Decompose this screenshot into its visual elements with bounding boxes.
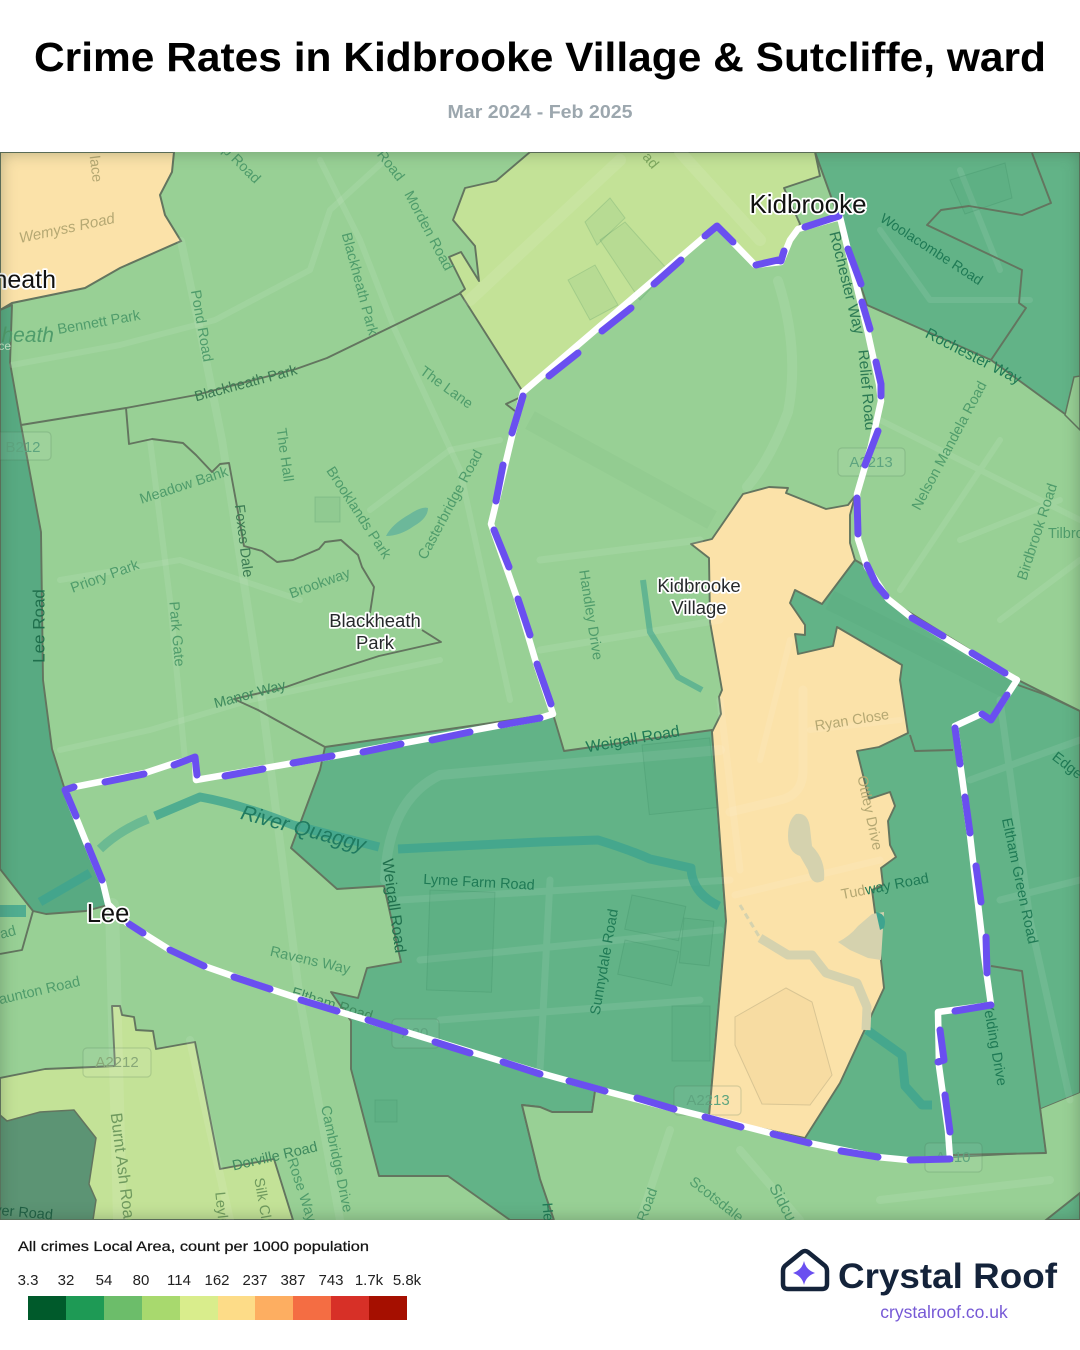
legend scale values: 1.7k [355, 1272, 384, 1289]
place labels: Lee [87, 900, 129, 928]
street labels: Weigall Road [585, 723, 681, 756]
ward boundaries [0, 153, 1080, 1220]
legend scale values: 114 [167, 1272, 191, 1289]
legend scale values: 54 [96, 1272, 112, 1289]
wordmark: Crystal Roof [838, 1257, 1057, 1296]
area: dark green south-west [0, 1110, 96, 1220]
street labels: Ryan Close [814, 707, 890, 735]
subtitle: date range: Mar 2024 - Feb 2025 [448, 102, 632, 122]
legend colour ramp [28, 1296, 407, 1320]
area: yellow-green north [449, 152, 820, 392]
road label plates: A210 [935, 1149, 971, 1166]
street labels: The Hall [272, 427, 296, 483]
website: crystalroof.co.uk [880, 1302, 1008, 1322]
area: base light green [0, 152, 1080, 1220]
street labels: Lee Road [29, 589, 48, 663]
street labels: p Road [219, 143, 263, 187]
street labels: The Lane [417, 363, 476, 412]
street labels: Rochester Way [825, 230, 867, 336]
road label plates [0, 432, 982, 1172]
area: mid green south (Lee Farm) [291, 560, 1080, 1220]
street labels: Ottley Drive [853, 774, 885, 852]
street labels: Road [373, 147, 407, 184]
street labels: Relief Road [854, 349, 878, 431]
street labels: Blackheath Park [338, 231, 381, 338]
legend scale values: 32 [58, 1272, 74, 1289]
ward boundary: white line and purple dashes [65, 216, 1017, 1160]
street labels: Blackheath Park [193, 362, 300, 405]
road label plates: A2212 [95, 1054, 139, 1071]
street labels: Sidcup [765, 1181, 803, 1233]
place labels: Blackheath [329, 610, 421, 631]
road network [12, 152, 1080, 1220]
place labels: Kidbrooke [749, 189, 867, 219]
legend scale values: 237 [242, 1272, 268, 1289]
street labels: ad [639, 150, 661, 172]
legend scale values: 743 [318, 1272, 344, 1289]
street labels: Bennett Park [56, 308, 142, 338]
legend scale values: 162 [204, 1272, 230, 1289]
street labels: Park Gate [165, 601, 187, 667]
street labels: Scotsdale [686, 1174, 746, 1226]
area: light wedge east [1065, 376, 1080, 430]
legend scale values: 387 [280, 1272, 306, 1289]
place labels: Kidbrooke [657, 575, 741, 596]
legend scale values: 5.8k [393, 1272, 422, 1289]
area: light green below ward line east [522, 1091, 1080, 1220]
street labels: Tudway Road [840, 870, 930, 903]
road label plates: B212 [5, 439, 41, 456]
street labels: Silk Close [250, 1177, 277, 1243]
street labels: Woolacombe Road [878, 210, 986, 288]
area: mid green west band [0, 305, 108, 914]
river label: River Quaggy [238, 801, 370, 857]
area: mid green corner south-east [1046, 1193, 1080, 1220]
legend [18, 1238, 422, 1320]
street labels: Morden Road [400, 188, 456, 273]
rail corridor tint [530, 420, 1010, 690]
street labels: Leyland [211, 1191, 232, 1243]
street labels: lace [86, 155, 105, 183]
street labels: Meadow Bank [138, 464, 231, 508]
street labels: Eltham Green Road [998, 817, 1040, 945]
street labels: Brooklands Park [322, 464, 394, 563]
street labels: Birdbrook Road [1015, 482, 1061, 582]
street labels: Handley Drive [575, 569, 605, 661]
river Quaggy [0, 580, 932, 1105]
title: Crime Rates in Kidbrooke Village & Sutcliffe, ward [34, 34, 1046, 80]
street labels: Burnt Ash Road [107, 1112, 139, 1229]
ponds [386, 508, 885, 1105]
sports pitches and plots [315, 163, 1012, 1122]
river through cream area [740, 905, 867, 1030]
street labels: Rochester Way [922, 325, 1024, 388]
logo: Crystal Roof [783, 1251, 1057, 1322]
legend scale values [18, 1272, 422, 1289]
street labels: Dorville Road [231, 1139, 319, 1174]
area: cream north-west [0, 152, 181, 310]
street labels: Ravens Way [268, 944, 352, 978]
place labels [0, 189, 867, 928]
legend title: All crimes Local Area, count per 1000 population [18, 1238, 369, 1254]
place labels: Village [671, 597, 727, 618]
street labels: Cambridge Drive [317, 1104, 355, 1214]
road label plates: A2213 [849, 454, 893, 471]
legend scale values: 3.3 [18, 1272, 38, 1289]
street labels: Road [634, 1186, 661, 1224]
icon: house with star [783, 1251, 827, 1289]
street labels: heath [1, 324, 54, 347]
street labels: Foxes Dale [231, 504, 256, 578]
street labels: Casterbridge Road [415, 447, 486, 562]
street labels: Weigall Road [378, 858, 408, 954]
street labels: Brookway [287, 565, 353, 602]
street labels: He [538, 1202, 556, 1222]
road label plates: A20 [402, 1025, 428, 1042]
street labels: Yelding Drive [979, 1001, 1009, 1087]
legend scale values: 80 [133, 1272, 149, 1289]
street labels: Pond Road [187, 289, 215, 363]
street labels: Eltham Road [290, 985, 374, 1025]
street labels: Sunnydale Road [588, 908, 622, 1016]
street labels: Lyme Farm Road [423, 872, 535, 894]
area: mid green north-east [815, 152, 1080, 425]
street labels: Manor Way [212, 677, 288, 712]
street labels: Priory Park [69, 557, 142, 597]
street labels: Rose Way [283, 1156, 319, 1225]
area: yellow-green south-west [0, 1006, 293, 1220]
road label plates: A2213 [686, 1092, 730, 1109]
street labels: Nelson Mandela Road [909, 379, 991, 513]
street labels: Wemyss Road [18, 210, 117, 247]
place labels: Park [356, 632, 395, 653]
area: cream Kidbrooke Village [691, 487, 908, 1138]
